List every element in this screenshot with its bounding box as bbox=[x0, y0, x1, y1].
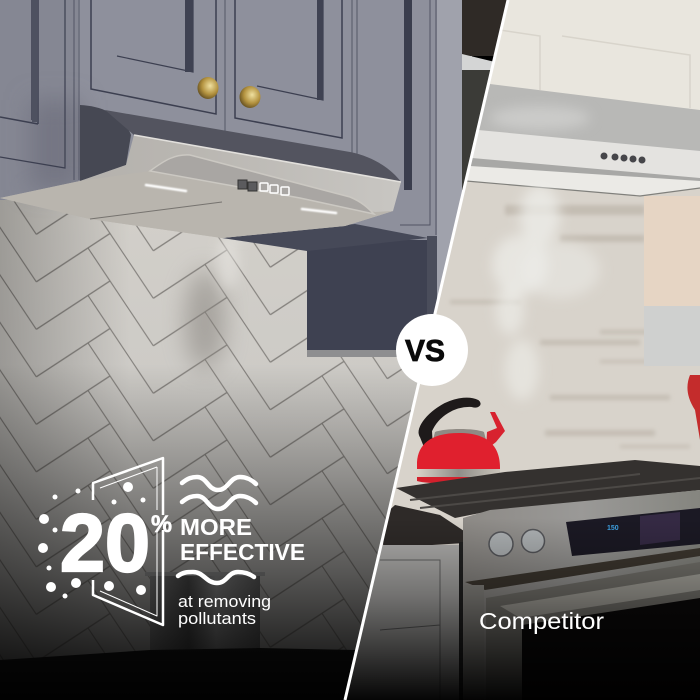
steam under hood bbox=[185, 211, 249, 370]
cream cabinets bbox=[486, 0, 700, 110]
stove grate bbox=[396, 460, 700, 518]
herringbone backsplash bbox=[0, 200, 418, 660]
stove front bbox=[463, 490, 700, 700]
oven control panel: 150 bbox=[607, 525, 619, 532]
heading: more effective: EFFECTIVE bbox=[180, 539, 305, 565]
VS badge bbox=[396, 314, 468, 386]
steel pot bbox=[145, 572, 265, 650]
dark interior and shelf bbox=[462, 0, 508, 190]
cabinet knobs bbox=[198, 77, 260, 108]
icon: pollutant particles bbox=[38, 482, 146, 598]
stove knobs bbox=[489, 530, 544, 556]
competitor hood bbox=[466, 84, 700, 196]
backsplash bbox=[382, 182, 700, 545]
oven control panel bbox=[566, 508, 700, 556]
big number: 20 bbox=[60, 498, 150, 589]
divider line bbox=[345, 0, 508, 700]
panel: competitor kitchen (right) bbox=[340, 0, 700, 700]
oven door and handle bbox=[486, 562, 700, 700]
icon: air waves top bbox=[182, 477, 256, 509]
grey cabinets bbox=[0, 0, 472, 298]
caption: pollutants bbox=[178, 609, 256, 628]
cooktop bbox=[0, 648, 355, 694]
hood lights bbox=[146, 185, 336, 213]
hood knobs bbox=[600, 152, 646, 164]
red kettle bbox=[417, 399, 505, 484]
red pot bbox=[687, 375, 700, 440]
panel: product kitchen (left) bbox=[0, 0, 520, 700]
left bottom dark gradient bbox=[0, 380, 417, 700]
right bottom dark gradient bbox=[346, 526, 700, 700]
heading: more effective: MORE bbox=[180, 514, 252, 540]
range hood bbox=[0, 105, 401, 238]
caption: at removing bbox=[178, 592, 271, 611]
heading: more effective bbox=[180, 514, 305, 565]
percent sign: % bbox=[151, 511, 172, 538]
competitor steam bbox=[492, 185, 600, 400]
under-cabinet dark box bbox=[222, 224, 437, 357]
granite counter bbox=[383, 505, 463, 545]
VS badge: VS bbox=[405, 333, 445, 368]
competitor label: Competitor bbox=[479, 608, 604, 634]
20% badge bbox=[38, 458, 305, 628]
caption bbox=[178, 592, 271, 628]
icon: filter door bbox=[93, 458, 163, 625]
lower cabinet bbox=[340, 542, 463, 700]
hood control buttons bbox=[238, 180, 289, 195]
icon: air wave bottom bbox=[178, 572, 254, 583]
